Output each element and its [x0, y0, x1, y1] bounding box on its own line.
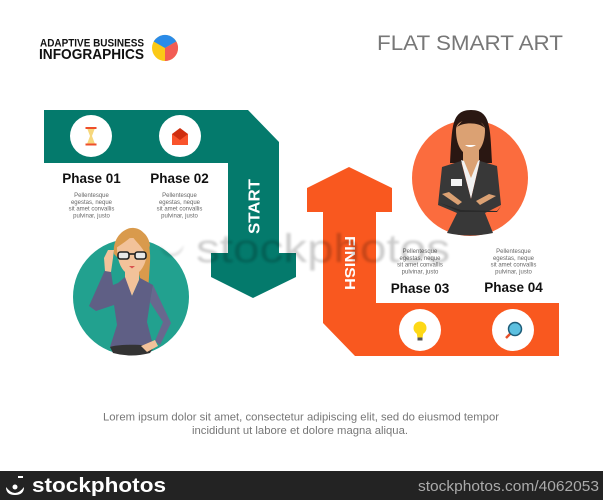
- text block: phase 02: egestas, neque: [159, 200, 201, 206]
- avatar: woman in black suit: [412, 110, 528, 236]
- heading: Phase 03: Phase 03: [391, 281, 450, 296]
- body caption: Lorem ipsum dolor sit amet, consectetur adipiscing elit, sed do eiusmod tempor: [103, 412, 499, 424]
- icon: hourglass: [70, 115, 112, 157]
- text block: phase 03: sit amet convallis: [397, 262, 443, 268]
- logo icon: pie: [152, 35, 178, 61]
- body caption: incididunt ut labore et dolore magna aliqua.: [192, 425, 408, 437]
- text block: phase 01: Pellentesque: [74, 193, 110, 199]
- text block: phase 04: egestas, neque: [493, 256, 535, 262]
- footer url: stockphotos.com/4062053: [418, 479, 599, 495]
- label: FINISH: FINISH: [341, 236, 357, 290]
- icon: light bulb: [399, 309, 441, 351]
- logo text: ADAPTIVE BUSINESS: [40, 38, 144, 50]
- text block: phase 01: pulvinar, justo: [73, 214, 110, 220]
- footer brand: stockphotos: [32, 474, 166, 497]
- avatar: woman with glasses: [73, 228, 189, 356]
- text block: phase 04: Pellentesque: [496, 249, 532, 255]
- footer bar: [0, 471, 603, 500]
- orange finish arrow: [307, 167, 559, 356]
- logo text: [39, 38, 144, 63]
- text block: phase 02: Pellentesque: [162, 193, 198, 199]
- text block: phase 03: Pellentesque: [403, 249, 438, 255]
- text block: phase 03: pulvinar, justo: [402, 270, 439, 276]
- heading: Phase 01: Phase 01: [62, 171, 121, 186]
- text block: phase 04: pulvinar, justo: [495, 270, 532, 276]
- footer logo icon: [6, 476, 24, 495]
- text block: phase 04: sit amet convallis: [491, 262, 536, 268]
- text block: phase 02: pulvinar, justo: [161, 214, 198, 220]
- icon: envelope: [159, 115, 201, 157]
- label: START: START: [246, 178, 264, 234]
- text block: phase 01: egestas, neque: [71, 200, 113, 206]
- text block: phase 03: egestas, neque: [399, 256, 441, 262]
- text block: phase 01: sit amet convallis: [69, 206, 114, 212]
- logo text: INFOGRAPHICS: [39, 46, 144, 63]
- teal start arrow: [44, 110, 296, 298]
- title: FLAT SMART ART: [377, 31, 563, 55]
- icon: magnifier: [492, 309, 534, 351]
- heading: Phase 02: Phase 02: [150, 171, 209, 186]
- heading: Phase 04: Phase 04: [484, 280, 543, 295]
- text block: phase 02: sit amet convallis: [157, 206, 202, 212]
- watermark: stockphotos: [196, 227, 450, 271]
